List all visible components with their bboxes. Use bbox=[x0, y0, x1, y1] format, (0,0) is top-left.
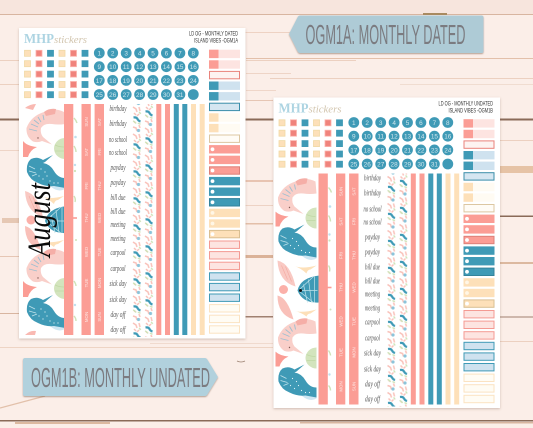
date circles: 23 bbox=[431, 147, 438, 154]
script event labels: day off bbox=[110, 324, 127, 334]
script event labels: carpool bbox=[365, 316, 380, 326]
date circles: 19 bbox=[123, 78, 130, 85]
date circles: 9 bbox=[352, 134, 356, 141]
sheet title bbox=[438, 102, 493, 114]
date circles: 21 bbox=[404, 147, 411, 154]
date circles: 27 bbox=[377, 161, 385, 168]
script event labels: bill due bbox=[110, 206, 126, 216]
weekday strips: MON bbox=[97, 278, 102, 288]
weekday strips: MON bbox=[338, 381, 343, 392]
date circles: 13 bbox=[149, 64, 157, 71]
weekday strips: WED bbox=[352, 282, 356, 293]
date circles: 5 bbox=[151, 50, 155, 57]
script event labels: no school bbox=[364, 216, 382, 226]
date circles: 25 bbox=[96, 92, 103, 99]
sheet title: ISLAND VIBES -OGM1A bbox=[194, 38, 238, 44]
script event labels: sick day bbox=[110, 294, 127, 304]
date circles: 6 bbox=[419, 120, 423, 127]
date circles: 15 bbox=[431, 134, 438, 141]
date circles: 25 bbox=[350, 161, 358, 168]
weekday strips: MON bbox=[352, 347, 356, 358]
date circles: 26 bbox=[109, 92, 117, 99]
weekday strips: FRI bbox=[97, 148, 102, 156]
script event labels: bill due bbox=[365, 262, 380, 272]
logo: stickers bbox=[54, 35, 87, 46]
script event labels: meeting bbox=[365, 288, 380, 298]
script event labels: payday bbox=[110, 162, 126, 172]
script event labels: meeting bbox=[365, 302, 380, 312]
date circles: 1 bbox=[98, 50, 102, 57]
weekday strips: FRI bbox=[352, 218, 356, 225]
date circles: 26 bbox=[364, 161, 371, 168]
text: OGM1B: MONTHLY UNDATED bbox=[31, 362, 210, 393]
weekday strips: TUE bbox=[352, 317, 356, 326]
date circles: 20 bbox=[391, 147, 398, 154]
weekday strips: THU bbox=[338, 283, 343, 292]
date circles: 3 bbox=[379, 120, 383, 127]
weekday strips: THU bbox=[97, 181, 102, 191]
weekday strips bbox=[336, 174, 358, 404]
weekday strips: TUE bbox=[338, 348, 343, 357]
date circles: 14 bbox=[417, 134, 425, 141]
script event labels: meeting bbox=[110, 233, 126, 243]
date circles: 29 bbox=[404, 161, 411, 168]
weekday strips: WED bbox=[97, 213, 102, 223]
date circles: 8 bbox=[192, 50, 196, 57]
month script: August: August bbox=[22, 182, 58, 259]
weekday strips: FRI bbox=[338, 252, 343, 259]
script event labels: payday bbox=[364, 246, 380, 256]
date circles: 3 bbox=[124, 50, 128, 57]
script event labels: birthday bbox=[364, 188, 381, 198]
weekday strips: SUN bbox=[84, 117, 89, 127]
sea creature artwork bbox=[23, 104, 67, 335]
date circles: 10 bbox=[364, 134, 371, 141]
date circles: 18 bbox=[109, 78, 117, 85]
date circles: 21 bbox=[149, 78, 157, 85]
script event labels: sick day bbox=[110, 278, 127, 288]
weekday strips: SAT bbox=[84, 148, 89, 156]
colored stripes bbox=[411, 174, 459, 404]
script event labels: no school bbox=[364, 204, 382, 214]
weekday strips: SAT bbox=[338, 217, 343, 226]
script event labels: bill due bbox=[110, 192, 126, 202]
script event labels: day off bbox=[365, 378, 381, 388]
script event labels: birthday bbox=[364, 172, 381, 182]
date circles: 2 bbox=[365, 120, 369, 127]
date circles: 28 bbox=[136, 92, 144, 99]
date circles: 27 bbox=[123, 92, 130, 99]
date circles: 28 bbox=[391, 161, 398, 168]
sticker sheet: monthly dated bbox=[19, 28, 246, 338]
tag: OGM1A monthly dated bbox=[289, 16, 484, 53]
date circles: 1 bbox=[352, 120, 356, 127]
date circles: 22 bbox=[163, 78, 170, 85]
weekday strips: TUE bbox=[97, 248, 102, 256]
date circles: 7 bbox=[178, 50, 182, 57]
logo: MHP bbox=[278, 102, 309, 116]
weekday strips: WED bbox=[338, 316, 343, 327]
date circles: 23 bbox=[176, 78, 184, 85]
date circles: 10 bbox=[109, 64, 117, 71]
weekday strips: SUN bbox=[338, 187, 343, 196]
script event labels: day off bbox=[110, 309, 127, 319]
date circles: 12 bbox=[391, 134, 398, 141]
date circles: 30 bbox=[163, 92, 170, 99]
sheet title: LD OG - MONTHLY DATED bbox=[189, 32, 238, 38]
script event labels: birthday bbox=[110, 118, 127, 128]
weekday strips bbox=[82, 104, 104, 335]
checkbox grid bbox=[24, 50, 88, 98]
date circles: 31 bbox=[431, 161, 438, 168]
weekday strips: THU bbox=[84, 213, 89, 223]
weekday strips: SUN bbox=[352, 382, 356, 391]
sheet title bbox=[189, 32, 238, 44]
date circles: 9 bbox=[98, 64, 102, 71]
logo bbox=[278, 102, 342, 116]
date circles: 19 bbox=[377, 147, 385, 154]
script event labels: payday bbox=[110, 177, 126, 187]
script event labels: no school bbox=[109, 147, 127, 157]
logo: MHP bbox=[24, 32, 54, 47]
date circles: 17 bbox=[350, 147, 358, 154]
logo: stickers bbox=[308, 104, 342, 116]
date circles: 4 bbox=[392, 120, 396, 127]
wide header strip bbox=[64, 104, 77, 335]
date circles: 30 bbox=[417, 161, 425, 168]
date circles bbox=[94, 48, 199, 100]
date circles: 24 bbox=[444, 147, 452, 154]
weekday strips: SAT bbox=[97, 118, 102, 126]
date circles: 12 bbox=[136, 64, 144, 71]
date circles: 24 bbox=[190, 78, 197, 85]
sea creature artwork bbox=[274, 178, 320, 400]
checkbox grid bbox=[279, 120, 342, 167]
script event labels: sick day bbox=[364, 364, 381, 374]
date circles: 11 bbox=[377, 134, 384, 141]
weekday strips: SAT bbox=[352, 187, 356, 196]
script event labels: no school bbox=[109, 134, 127, 144]
script event labels: carpool bbox=[110, 263, 126, 273]
date circles: 4 bbox=[138, 50, 142, 57]
date circles: 8 bbox=[446, 120, 450, 127]
date circles: 29 bbox=[149, 92, 157, 99]
script event labels: carpool bbox=[110, 247, 126, 257]
weekday strips: TUE bbox=[84, 279, 89, 287]
date circles: 2 bbox=[111, 50, 115, 57]
script event labels bbox=[109, 103, 127, 334]
sheet title: LD OG - MONTHLY UNDATED bbox=[438, 102, 493, 108]
script event labels: sick day bbox=[364, 348, 381, 358]
date circles: 16 bbox=[190, 64, 197, 71]
date circles: 17 bbox=[96, 78, 103, 85]
tag: OGM1B monthly undated bbox=[23, 358, 218, 396]
date circles: 16 bbox=[444, 134, 452, 141]
script event labels: payday bbox=[364, 232, 380, 242]
date circles: 7 bbox=[433, 120, 437, 127]
weekday strips: FRI bbox=[84, 182, 89, 190]
script event labels: bill due bbox=[365, 276, 380, 286]
colored stripes bbox=[156, 104, 205, 335]
date circles: 20 bbox=[136, 78, 144, 85]
weekday strips: THU bbox=[352, 251, 356, 260]
script event labels: birthday bbox=[110, 103, 127, 113]
date circles: 22 bbox=[417, 147, 425, 154]
weekday strips: WED bbox=[84, 247, 89, 257]
sheet title: ISLAND VIBES -OGM1B bbox=[448, 108, 493, 114]
date circles: 18 bbox=[364, 147, 371, 154]
date circles: 11 bbox=[123, 64, 130, 71]
weekday strips: SUN bbox=[97, 312, 102, 322]
washi strips bbox=[386, 174, 408, 406]
date circles: 13 bbox=[404, 134, 411, 141]
date circles: 5 bbox=[406, 120, 410, 127]
script event labels bbox=[364, 172, 382, 404]
script event labels: meeting bbox=[110, 219, 126, 229]
label tabs column bbox=[209, 50, 240, 333]
date circles: 31 bbox=[176, 92, 184, 99]
weekday strips: MON bbox=[84, 312, 89, 322]
wide header strip bbox=[318, 174, 332, 404]
washi strips bbox=[132, 104, 154, 337]
script event labels: day off bbox=[365, 394, 381, 404]
date circles: 6 bbox=[165, 50, 169, 57]
label tabs column bbox=[464, 119, 494, 403]
date circles: 15 bbox=[176, 64, 184, 71]
script event labels: carpool bbox=[365, 332, 380, 342]
date circles bbox=[348, 117, 453, 169]
logo bbox=[24, 32, 87, 47]
date circles: 14 bbox=[163, 64, 170, 71]
sticker sheet: monthly undated bbox=[274, 98, 500, 408]
